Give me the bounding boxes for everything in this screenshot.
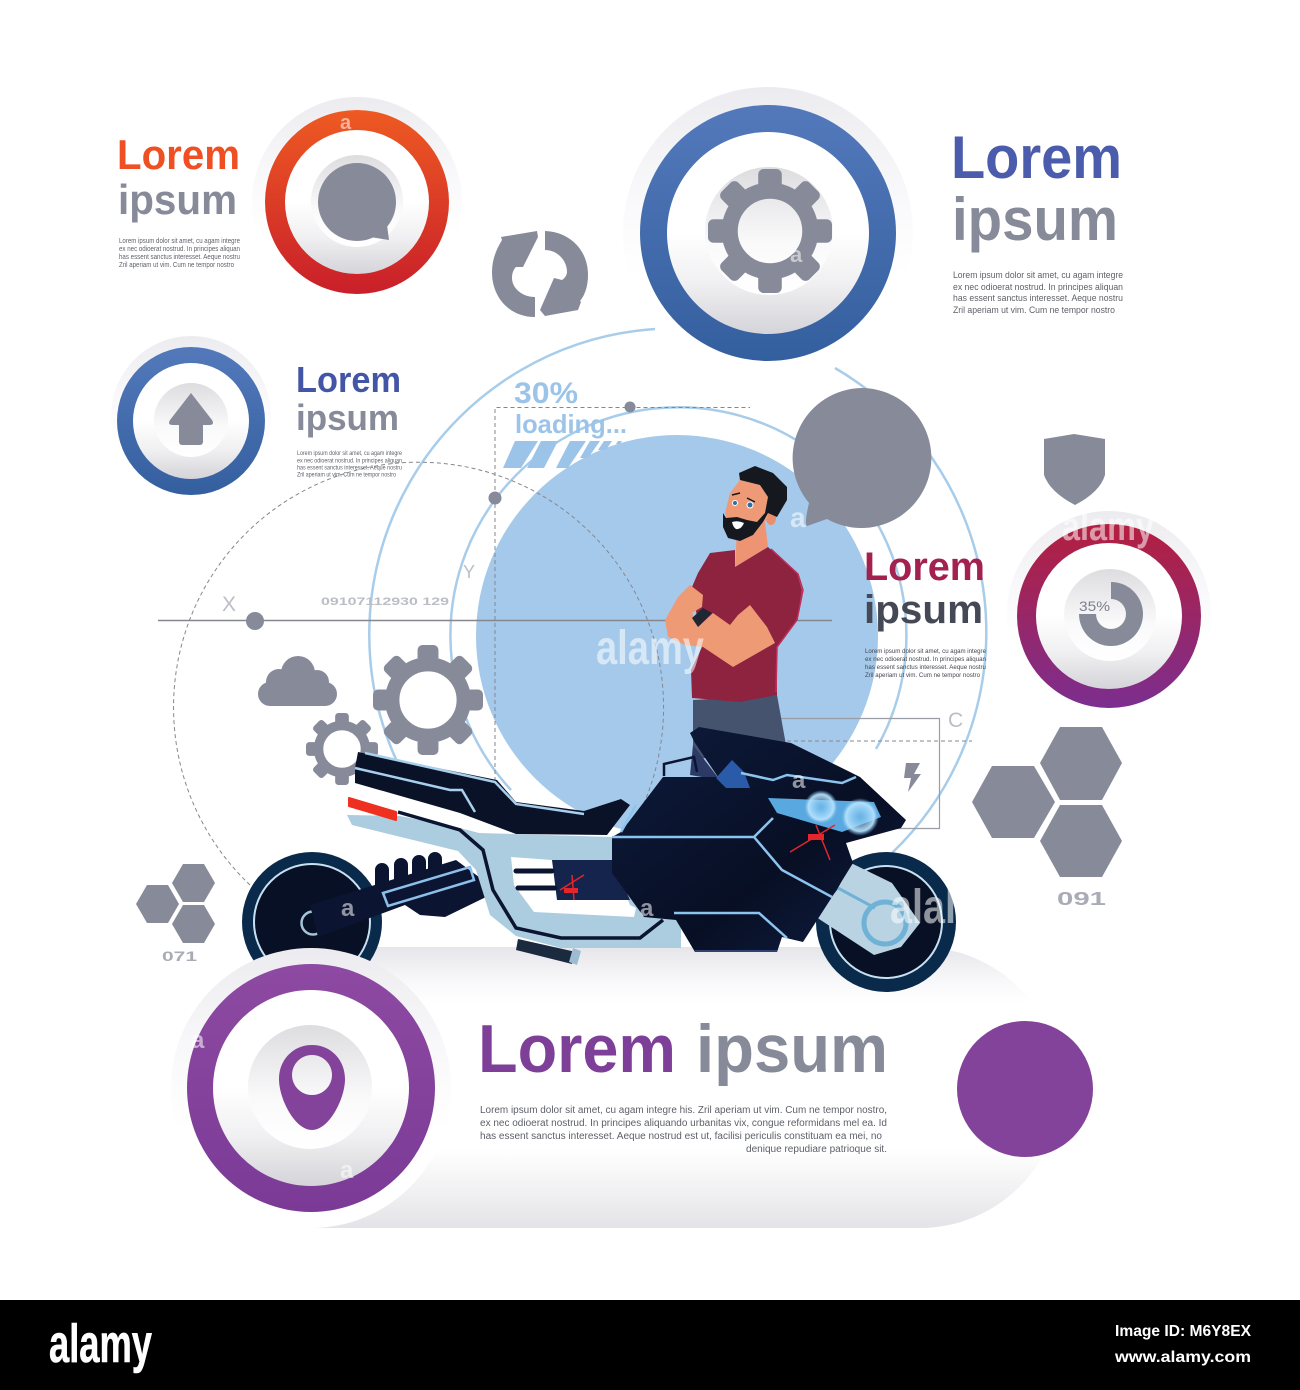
heading: maroon lorem ipsum: Lorem bbox=[864, 545, 985, 589]
swingarm slot bbox=[383, 867, 474, 906]
text: blue block body: ex nec odioerat nostrud. In principes aliquan bbox=[953, 282, 1123, 292]
heading: blue lorem ipsum bbox=[951, 124, 1122, 253]
circle: red speech bbox=[252, 97, 462, 307]
label: 091: 091 bbox=[1057, 889, 1106, 909]
motorcycle bbox=[242, 727, 956, 992]
text: blue block body: Lorem ipsum dolor sit amet, cu agam integre bbox=[953, 270, 1123, 280]
diagram axis labels bbox=[222, 562, 963, 732]
loading progress indicator bbox=[503, 377, 627, 468]
heading: bottom lorem ipsum: Lorem bbox=[478, 1011, 676, 1087]
rider ear bbox=[766, 511, 776, 525]
rider eyes bbox=[732, 493, 755, 508]
heading: red lorem ipsum: Lorem bbox=[117, 131, 240, 178]
swingarm coils bbox=[382, 859, 435, 885]
text: red block body: Lorem ipsum dolor sit amet, cu agam integre bbox=[119, 238, 240, 245]
icon: recycle arrows bbox=[492, 231, 588, 317]
large light blue circle behind rider bbox=[476, 435, 878, 837]
rider lower leg bbox=[690, 745, 720, 780]
label: 071: 071 bbox=[162, 948, 197, 964]
text: small blue block body: has essent sanctus interesset. Aeque nostru bbox=[297, 466, 402, 472]
base pill panel bbox=[311, 947, 1060, 1228]
stock watermark: alamy bbox=[596, 622, 704, 675]
icon: hexagon cluster right bbox=[972, 727, 1122, 877]
rider shirt bbox=[691, 547, 802, 702]
handlebar mount bbox=[664, 757, 697, 776]
heading: maroon lorem ipsum: ipsum bbox=[864, 588, 983, 632]
diagram axis labels: Y bbox=[463, 562, 475, 582]
heading: red lorem ipsum bbox=[117, 131, 240, 223]
heading: red lorem ipsum: ipsum bbox=[118, 176, 237, 223]
text: blue block body bbox=[953, 270, 1123, 315]
fork strip bbox=[838, 888, 875, 908]
text: bottom block body bbox=[480, 1105, 887, 1155]
footer image id: Image ID: M6Y8EX bbox=[1115, 1323, 1251, 1340]
body light trim bbox=[612, 773, 856, 938]
windscreen glow bbox=[716, 760, 750, 788]
diagram axis labels: C bbox=[948, 709, 963, 732]
icon: large gear bbox=[373, 645, 483, 755]
rider wristband bbox=[692, 608, 712, 627]
circle: small blue arrow bbox=[111, 336, 271, 496]
headlight bbox=[768, 790, 881, 836]
circle: big blue gear bbox=[623, 87, 913, 377]
stock watermark: a bbox=[340, 112, 352, 134]
main fairing bbox=[612, 727, 906, 952]
shirt stripe bbox=[771, 549, 803, 692]
chart: progress donut bbox=[1079, 582, 1143, 646]
text: maroon block body: has essent sanctus interesset. Aeque nostru bbox=[865, 664, 986, 671]
text: small blue block body: ex nec odioerat nostrud. In principes aliquan bbox=[297, 458, 402, 464]
icon: small gear bbox=[306, 713, 378, 785]
frame struts bbox=[516, 871, 555, 888]
icon: speech bubble bbox=[318, 163, 396, 241]
icon: shield bbox=[1044, 434, 1105, 505]
rider neck bbox=[735, 522, 768, 567]
text: red block body: Zril aperiam ut vim. Cum ne tempor nostro bbox=[119, 262, 234, 269]
text: bottom block body: ex nec odioerat nostrud. In principes aliquando urbanitas vix, congue reformidans mel ea. Id bbox=[480, 1118, 887, 1129]
footer url: www.alamy.com bbox=[1114, 1349, 1251, 1366]
text: maroon block body: Lorem ipsum dolor sit amet, cu agam integre bbox=[865, 648, 986, 655]
heading: blue lorem ipsum: ipsum bbox=[952, 186, 1118, 253]
text: blue block body: Zril aperiam ut vim. Cum ne tempor nostro bbox=[953, 305, 1115, 315]
text: small blue block body bbox=[297, 451, 403, 478]
rider face bbox=[725, 480, 768, 532]
icon: lightning bolt bbox=[904, 763, 921, 792]
rider hair and beard bbox=[723, 466, 787, 541]
chart: progress donut: 35% bbox=[1079, 598, 1110, 614]
text: red block body: ex nec odioerat nostrud. In principes aliquan bbox=[119, 246, 240, 253]
stock watermark: alal bbox=[890, 881, 956, 934]
rider figure bbox=[665, 466, 803, 780]
heading: small blue lorem ipsum: Lorem bbox=[296, 359, 401, 400]
diagram node dots bbox=[246, 402, 636, 630]
footer logo: alamy bbox=[49, 1314, 152, 1374]
text: bottom block body: denique repudiare patrioque sit. bbox=[746, 1144, 887, 1155]
red sparks bbox=[560, 825, 835, 900]
heading: blue lorem ipsum: Lorem bbox=[951, 124, 1122, 191]
diagram axis labels: X bbox=[222, 593, 236, 616]
stock watermark: a bbox=[790, 242, 803, 267]
footer bar bbox=[0, 1300, 1300, 1390]
heading: bottom lorem ipsum bbox=[478, 1011, 888, 1087]
icon: cloud bbox=[258, 656, 337, 706]
heading: maroon lorem ipsum bbox=[864, 545, 985, 632]
circle: big purple location bbox=[171, 948, 451, 1228]
text: maroon block body bbox=[865, 648, 986, 679]
loading progress indicator: loading... bbox=[515, 409, 627, 439]
rider jeans bbox=[693, 695, 786, 760]
icon: location pin bbox=[279, 1045, 345, 1130]
text: bottom block body: has essent sanctus interesset. Aeque nostrud est ut, facilisi periculis constituam ea mei, no bbox=[480, 1131, 882, 1142]
text: small blue block body: Zril aperiam ut vim. Cum ne tempor nostro bbox=[297, 472, 397, 478]
heading: bottom lorem ipsum: ipsum bbox=[696, 1011, 888, 1087]
text: maroon block body: Zril aperiam ut vim. Cum ne tempor nostro bbox=[865, 672, 980, 679]
icon: gear bbox=[708, 169, 832, 293]
stock watermark: a bbox=[191, 1027, 205, 1054]
front wheel bbox=[816, 852, 956, 992]
light frame bbox=[347, 815, 681, 948]
heading: small blue lorem ipsum bbox=[296, 359, 401, 438]
rear wheel bbox=[242, 852, 382, 992]
belly panel edge bbox=[695, 950, 777, 952]
diagram axis labels: 09107112930 129 bbox=[321, 596, 449, 608]
stock watermark: a bbox=[340, 1157, 354, 1184]
rider arms bbox=[665, 585, 775, 667]
rider smile bbox=[732, 521, 744, 529]
tail and seat bbox=[355, 752, 630, 835]
stock watermark: a bbox=[341, 895, 355, 922]
stock watermark: a bbox=[792, 767, 806, 794]
loading progress indicator: 30% bbox=[514, 377, 578, 410]
heading: small blue lorem ipsum: ipsum bbox=[296, 397, 399, 438]
stock watermark: a bbox=[640, 895, 654, 922]
text: blue block body: has essent sanctus interesset. Aeque nostru bbox=[953, 293, 1123, 303]
stock watermark: alamy bbox=[1062, 505, 1155, 549]
icon: up arrow bbox=[169, 393, 213, 445]
front fork bbox=[816, 863, 920, 955]
stock watermark bbox=[191, 112, 1155, 1184]
stock watermark: a bbox=[790, 502, 806, 533]
fork hub bbox=[864, 902, 906, 944]
text: maroon block body: ex nec odioerat nostrud. In principes aliquan bbox=[865, 656, 986, 663]
circle: maroon progress bbox=[1007, 511, 1211, 715]
text: small blue block body: Lorem ipsum dolor sit amet, cu agam integre bbox=[297, 451, 403, 457]
tail light bar bbox=[349, 798, 396, 820]
text: bottom block body: Lorem ipsum dolor sit amet, cu agam integre his. Zril aperiam ut vim. Cum ne tempor nostro, bbox=[480, 1105, 887, 1116]
tail blue trim bbox=[355, 753, 584, 814]
frame dark line bbox=[398, 812, 663, 938]
frame inner panel bbox=[552, 860, 630, 900]
exhaust bbox=[516, 939, 581, 965]
swingarm bbox=[310, 860, 486, 937]
icon: large speech bubble bbox=[793, 388, 931, 528]
text: red block body: has essent sanctus interesset. Aeque nostru bbox=[119, 254, 240, 261]
text: red block body bbox=[119, 238, 240, 269]
technical line diagram bbox=[158, 329, 986, 885]
purple dot bbox=[957, 1021, 1093, 1157]
icon: hexagon cluster left bbox=[136, 864, 215, 943]
